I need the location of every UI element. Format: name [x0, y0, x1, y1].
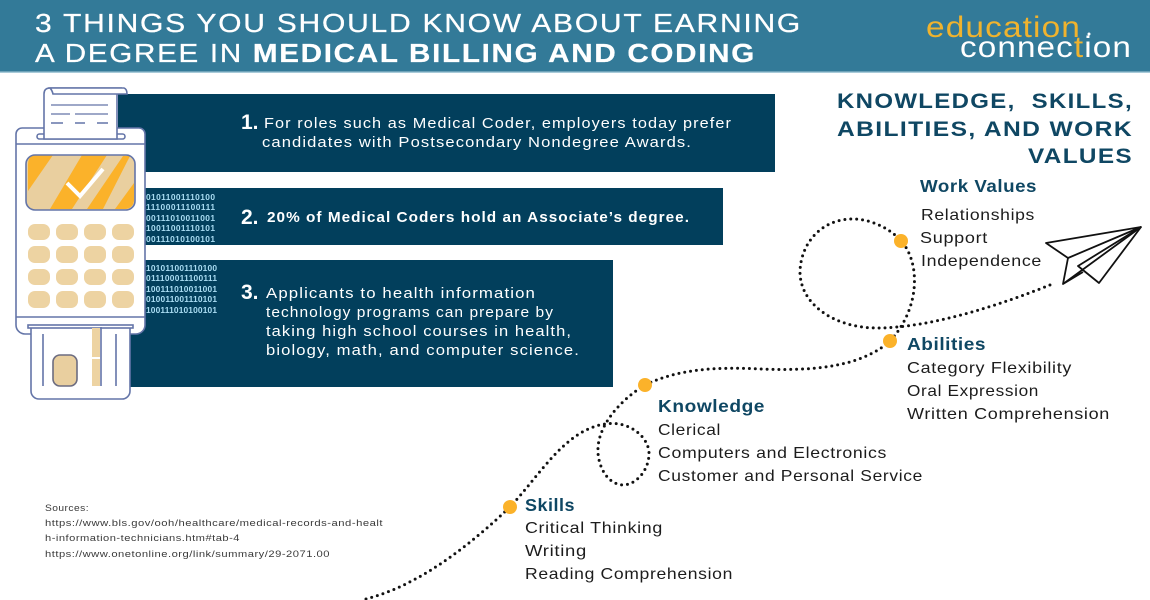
panel: fact 2: 2.: [241, 206, 259, 229]
panel: fact 2: 20% of Medical Coders hold an Associate’s degree.: [267, 209, 690, 226]
milestone: skills: Critical Thinking: [525, 520, 663, 537]
milestone: work values: [894, 176, 1042, 270]
keypad: [28, 224, 134, 308]
milestone: knowledge: Customer and Personal Service: [658, 468, 923, 485]
icon: paper plane: [1046, 227, 1141, 284]
logo: education connection: [926, 11, 1132, 64]
header banner: [0, 0, 1150, 73]
milestone: abilities: [883, 334, 1110, 423]
milestone: knowledge: Knowledge: [658, 396, 765, 416]
binary code 3: 101011001110100: [146, 263, 217, 273]
milestone: work values: Support: [920, 230, 988, 247]
heading: knowledge, skills, abilities, and work values: ABILITIES, AND WORK: [837, 117, 1133, 141]
binary code 2: 00111010011001: [146, 213, 215, 223]
title: [35, 8, 802, 68]
panel: fact 1: 1.: [241, 111, 259, 134]
binary code 3: 100111010011001: [146, 284, 217, 294]
sources: [45, 503, 383, 559]
binary code 3: 010011001110101: [146, 294, 217, 304]
milestone: work values: Work Values: [920, 176, 1037, 196]
milestone: work values: Independence: [921, 253, 1042, 270]
title: A DEGREE IN MEDICAL BILLING AND CODING: [35, 38, 756, 68]
milestone: abilities: Abilities: [907, 334, 986, 354]
sources: https://www.bls.gov/ooh/healthcare/medical-records-and-healt: [45, 518, 383, 528]
sources: https://www.onetonline.org/link/summary/29-2071.00: [45, 549, 330, 559]
logo: education connection: connec tion: [960, 31, 1132, 64]
panel: fact 2: [130, 188, 723, 245]
panel: fact 3: biology, math, and computer science.: [266, 342, 580, 359]
binary code 3: 011100011100111: [146, 273, 217, 283]
milestone: knowledge: [638, 378, 923, 485]
heading: knowledge, skills, abilities, and work values: [837, 89, 1133, 168]
binary code 2: 10011001110101: [146, 223, 215, 233]
panel: fact 3: technology programs can prepare by: [266, 304, 554, 321]
milestone: abilities: Oral Expression: [907, 383, 1039, 400]
milestone: skills: Writing: [525, 543, 587, 560]
panel: fact 3: [130, 260, 613, 387]
milestone: skills: Skills: [525, 495, 575, 515]
panel: fact 3: 3.: [241, 281, 259, 304]
logo: education connection: education: [926, 11, 1081, 44]
title: 3 THINGS YOU SHOULD KNOW ABOUT EARNING: [35, 8, 802, 38]
binary code 2: 11100011100111: [146, 202, 215, 212]
heading: knowledge, skills, abilities, and work values: KNOWLEDGE, SKILLS,: [837, 89, 1133, 113]
icon: card payment terminal: [16, 88, 145, 399]
milestone: knowledge: Clerical: [658, 422, 721, 439]
milestone: work values: Relationships: [921, 207, 1035, 224]
binary code 2: [146, 192, 215, 244]
panel: fact 1: For roles such as Medical Coder, employers today prefer: [264, 115, 732, 132]
milestone: knowledge: Computers and Electronics: [658, 445, 887, 462]
milestone: skills: Reading Comprehension: [525, 566, 733, 583]
panel: fact 1: candidates with Postsecondary Nondegree Awards.: [262, 134, 692, 151]
binary code 3: 100111010100101: [146, 305, 217, 315]
panel: fact 1: [118, 94, 775, 172]
binary code 3: [146, 263, 217, 315]
binary code 2: 00111010100101: [146, 234, 215, 244]
panel: fact 3: taking high school courses in health,: [266, 323, 572, 340]
milestone: abilities: Written Comprehension: [907, 406, 1110, 423]
milestone: abilities: Category Flexibility: [907, 360, 1072, 377]
terminal body: [16, 128, 145, 334]
panel: fact 3: Applicants to health information: [266, 285, 536, 302]
credit card: [28, 325, 133, 399]
sources: h-information-technicians.htm#tab-4: [45, 533, 240, 543]
heading: knowledge, skills, abilities, and work values: VALUES: [1028, 144, 1133, 168]
screen with check mark: [26, 155, 135, 210]
binary code 2: 01011001110100: [146, 192, 215, 202]
sources: Sources:: [45, 503, 89, 513]
receipt: [37, 88, 127, 139]
dotted flight path: [366, 219, 1050, 599]
milestone: skills: [503, 495, 733, 583]
